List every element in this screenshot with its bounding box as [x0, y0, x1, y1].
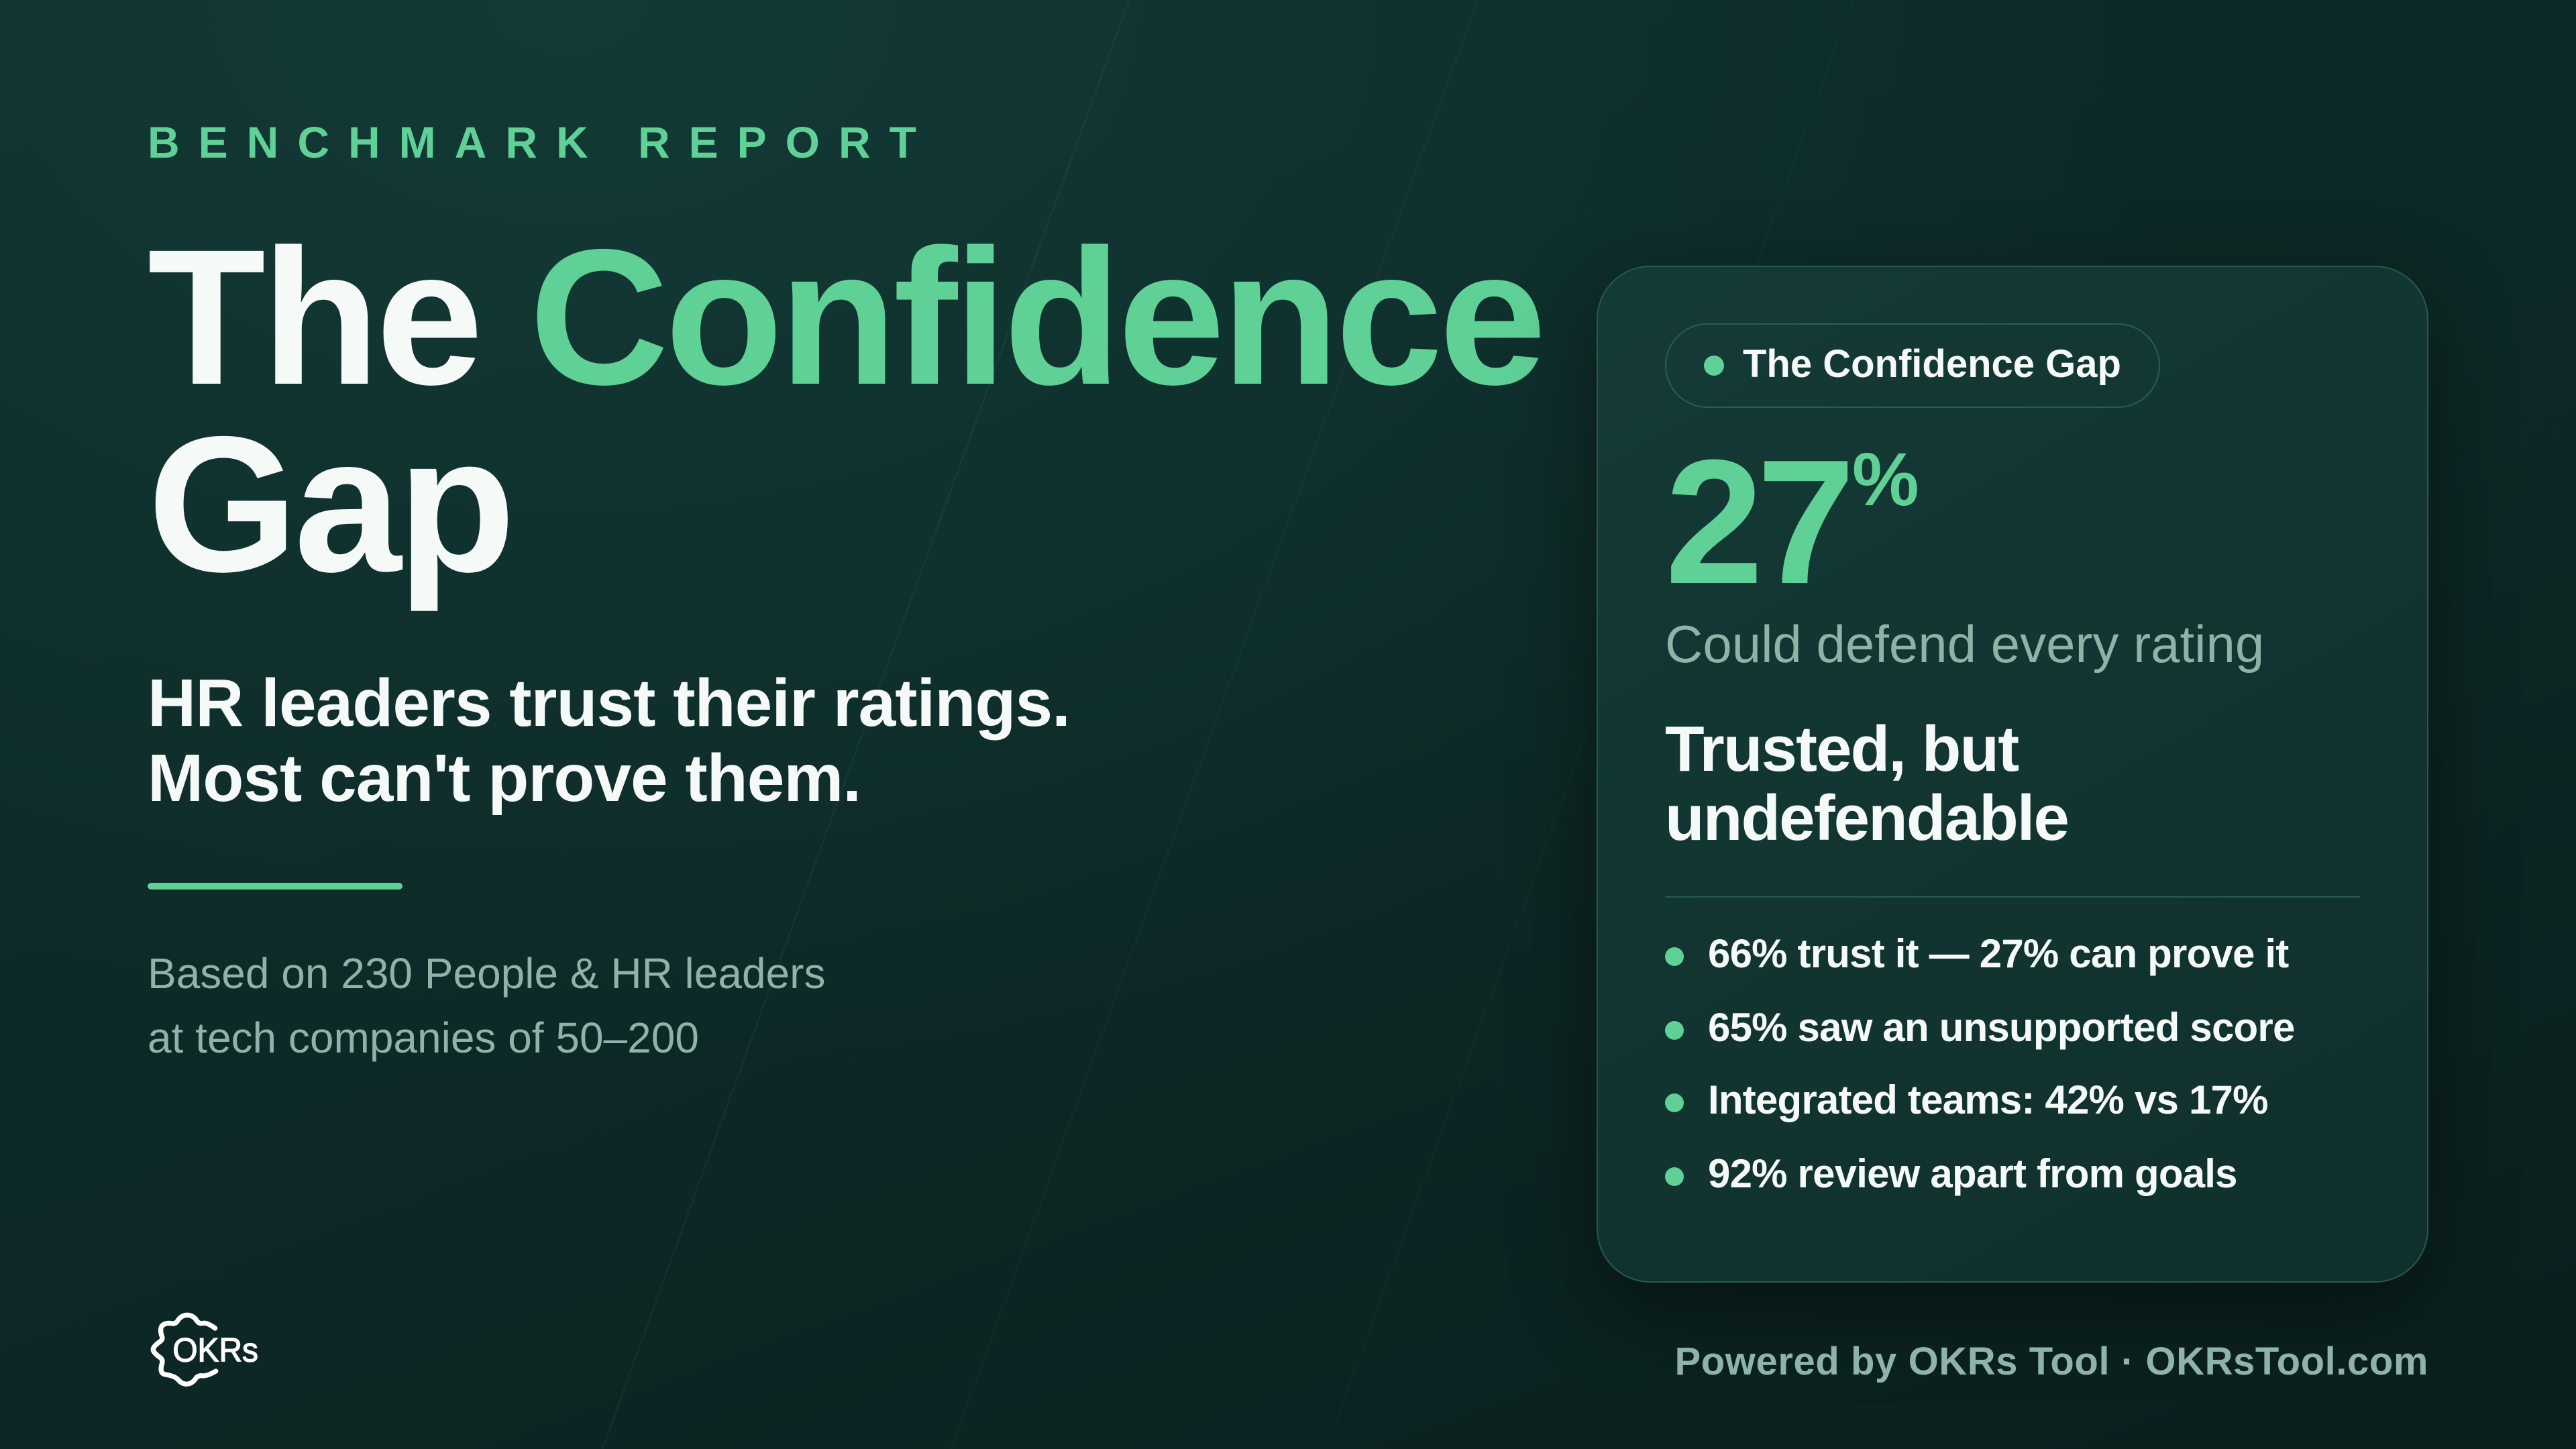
logo: [150, 1312, 258, 1387]
logo: OKRs: [172, 1331, 258, 1368]
pill: [1665, 323, 2160, 408]
pill label: The Confidence Gap: [1743, 342, 2121, 386]
accent rule: [148, 883, 402, 890]
divider: [1665, 896, 2360, 898]
panel: stat card: [1597, 266, 2428, 1283]
list item 1: 66% trust it — 27% can prove it: [1708, 931, 2288, 976]
title: The Confidence: [148, 209, 1543, 425]
title: Gap: [148, 396, 512, 612]
bullet 2: [1665, 1021, 1684, 1040]
subtitle: HR leaders trust their ratings.: [148, 665, 1070, 741]
footer credit: Powered by OKRs Tool · OKRsTool.com: [1675, 1340, 2428, 1383]
bullet 4: [1665, 1167, 1684, 1186]
percent sign: %: [1852, 437, 1919, 521]
card headline: Trusted, but: [1665, 713, 2018, 785]
source note: [148, 949, 825, 1062]
list item 2: 65% saw an unsupported score: [1708, 1005, 2295, 1050]
source note: Based on 230 People & HR leaders: [148, 949, 825, 998]
subtitle: [148, 665, 1070, 816]
bullet 1: [1665, 947, 1684, 966]
subtitle: Most can't prove them.: [148, 741, 861, 816]
card headline: undefendable: [1665, 782, 2068, 854]
bullet 3: [1665, 1093, 1684, 1112]
stat caption: Could defend every rating: [1665, 614, 2264, 674]
list item 4: 92% review apart from goals: [1708, 1151, 2237, 1196]
title: [148, 209, 1543, 612]
big stat: 27: [1665, 423, 1849, 621]
list item 3: Integrated teams: 42% vs 17%: [1708, 1077, 2268, 1122]
eyebrow: BENCHMARK REPORT: [148, 117, 935, 167]
source note: at tech companies of 50–200: [148, 1014, 699, 1062]
pill dot: [1704, 356, 1724, 376]
card headline: [1665, 713, 2068, 854]
